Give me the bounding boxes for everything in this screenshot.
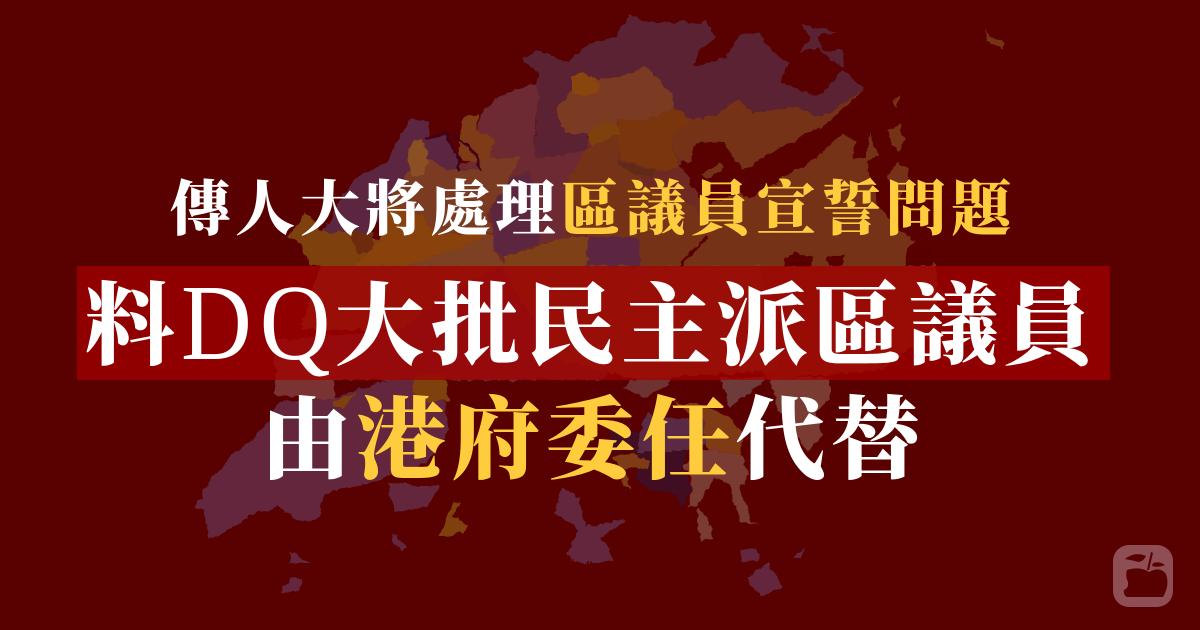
central New Territories districts [530,67,937,380]
southern islands [282,483,803,597]
middle band under the banner [275,266,780,380]
red banner [77,266,1110,380]
headline line 2: 料 [85,278,175,377]
harbour inlets and rivers [425,133,933,266]
northern New Territories region [522,15,864,158]
outlying islands in the east [887,28,1005,200]
land base under the New Territories [400,118,745,266]
headline line 3: 由港府委任代替 [261,392,926,491]
headline line 2: 大批民主派區議員 [335,278,1099,377]
headline line 2: DQ [181,264,339,383]
headline line 1: 傳人大將處理區議員宣誓問題 [170,177,1016,243]
headline line 2 [85,264,1099,383]
western New Territories districts [287,84,587,266]
Lantau Island and Airport [195,360,450,538]
Hong Kong Island and Kowloon districts [610,378,830,542]
